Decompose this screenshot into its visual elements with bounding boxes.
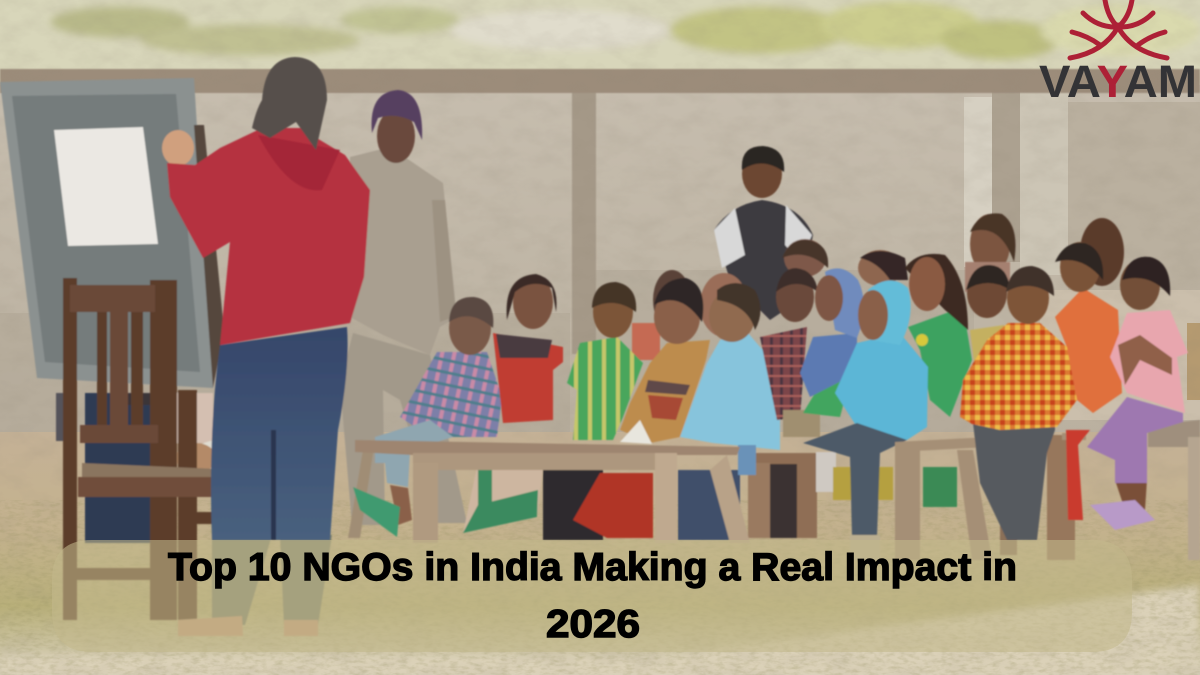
child: boy in bright blue hoodie (803, 280, 928, 560)
book on table (620, 420, 652, 444)
left stool behind table (747, 452, 836, 538)
wooden chair (63, 278, 285, 620)
right stool (895, 433, 1086, 560)
standing man with jacket (714, 146, 813, 320)
foliage background (0, 0, 1200, 90)
blackboard (0, 78, 224, 388)
teacher (162, 57, 370, 636)
red hoodie (167, 128, 370, 345)
child: girl in green dress (833, 254, 972, 507)
trousers (340, 333, 467, 525)
child: girl in red top (463, 274, 563, 533)
adult: man in purple cap (340, 90, 467, 525)
back row children (632, 213, 1124, 360)
face (377, 109, 415, 163)
concrete wall (0, 82, 1200, 445)
hand (162, 130, 194, 166)
child: boy in light blue sweater (678, 283, 780, 540)
banner background (52, 540, 1132, 652)
shirt (350, 147, 457, 355)
person seated behind chair (56, 393, 213, 543)
purple cap (372, 90, 422, 140)
paper on board (54, 127, 158, 246)
ground (0, 432, 1200, 675)
child: boy behind checked shirt (966, 265, 1010, 370)
hair (252, 57, 327, 150)
title banner (52, 540, 1132, 652)
title line 1: Top 10 NGOs in India Making a Real Impact in (168, 546, 1017, 589)
child: boy in pink shirt (1087, 257, 1188, 530)
right bench (1148, 420, 1200, 560)
large front table (355, 440, 750, 543)
child: girl in mustard top (573, 278, 710, 538)
child: boy in green shirt (543, 282, 643, 540)
lower legs (212, 535, 332, 625)
child: boy in blue hoodie behind (800, 268, 864, 417)
logo wordmark: VAYAM (1039, 56, 1197, 107)
child: boy in orange checked shirt (960, 266, 1077, 540)
child: boy in orange shirt (1055, 242, 1122, 520)
wall cap (0, 69, 1200, 93)
table back legs (348, 450, 373, 538)
cloth bundle on chair (176, 438, 282, 478)
logo emblem (1070, 0, 1167, 58)
logo: VAYAM (1039, 0, 1197, 107)
jeans (211, 327, 348, 540)
title line 2: 2026 (546, 603, 640, 646)
child: plaid boy behind (760, 268, 820, 437)
sandy path (0, 585, 1200, 675)
child: plaid shirt boy (353, 297, 502, 537)
